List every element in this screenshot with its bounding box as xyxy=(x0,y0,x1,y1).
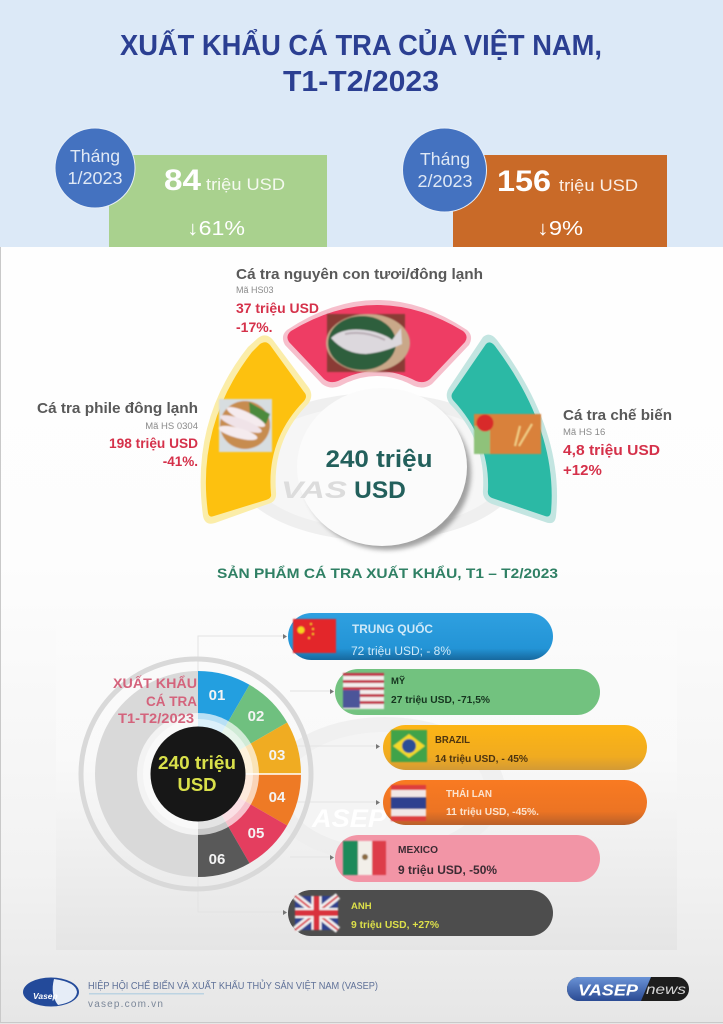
footer: VASEP news badge xyxy=(567,977,689,1001)
title xyxy=(120,28,602,98)
center total: 240 triệu USD xyxy=(281,388,471,550)
donut chart: USD xyxy=(177,774,217,795)
icon: processed food photo xyxy=(474,414,541,454)
segment: whole fish, red xyxy=(283,300,471,388)
pill: China: TRUNG QUỐC xyxy=(352,622,433,636)
label: processed: +12% xyxy=(563,462,602,479)
pill: UK: 9 triệu USD, +27% xyxy=(351,919,440,931)
header band xyxy=(0,0,723,247)
pill: Brazil xyxy=(376,725,647,770)
donut chart: 01 xyxy=(209,687,225,704)
segment: processed, teal xyxy=(447,335,557,523)
pill: Mexico xyxy=(330,835,600,882)
center total: 240 triệu USD: 240 triệu xyxy=(326,446,432,473)
label: processed: Cá tra chế biến xyxy=(563,407,672,424)
icon: flag USA xyxy=(343,673,384,709)
pill: China: 72 triệu USD; - 8% xyxy=(351,646,451,658)
pill: Brazil: 14 triệu USD, - 45% xyxy=(435,753,529,765)
pill: Mexico: MEXICO xyxy=(398,844,438,856)
segment 01 xyxy=(198,671,250,774)
donut chart xyxy=(81,659,311,889)
card: January 2023: ↓61% xyxy=(187,218,245,240)
footer: organisation text xyxy=(88,979,378,1010)
center total: 240 triệu USD: USD xyxy=(354,477,406,504)
pill: USA: 27 triệu USD, -71,5% xyxy=(391,694,491,706)
card: January 2023: 84 xyxy=(164,164,201,197)
icon: fillet photo xyxy=(217,399,272,452)
label: whole fish: -17%. xyxy=(236,319,273,335)
donut chart: 04 xyxy=(269,789,286,806)
watermark: VASEP upper: VAS xyxy=(281,477,347,504)
card: January 2023: Tháng xyxy=(70,146,120,166)
card: January 2023: triệu USD xyxy=(206,175,285,194)
pill: Mexico: 9 triệu USD, -50% xyxy=(398,863,497,877)
pill: UK xyxy=(283,890,553,936)
card: January 2023 xyxy=(55,128,327,247)
segment 02 xyxy=(198,685,287,774)
label: fillet: Mã HS 0304 xyxy=(145,421,198,432)
card: February 2023: triệu USD xyxy=(559,176,638,195)
donut chart: 06 xyxy=(209,851,225,868)
inner pale ring xyxy=(137,713,259,835)
label: whole fish xyxy=(236,266,483,335)
donut chart: 05 xyxy=(248,825,264,842)
donut chart: 240 triệu xyxy=(158,752,236,773)
label: whole fish: 37 triệu USD xyxy=(236,300,319,316)
pill: Thailand: THÁI LAN xyxy=(446,787,492,800)
pill: Brazil: BRAZIL xyxy=(435,735,470,746)
donut label: CÁ TRA xyxy=(146,694,197,709)
label: processed xyxy=(563,407,672,479)
segment: fillet, yellow xyxy=(201,335,311,524)
label: fillet: -41%. xyxy=(163,454,198,469)
label: whole fish: Mã HS03 xyxy=(236,285,274,295)
donut chart: 03 xyxy=(269,747,285,764)
watermark: VASEP lower: ASEP xyxy=(311,805,386,833)
lower chart panel xyxy=(56,600,677,950)
label: fillet: Cá tra phile đông lạnh xyxy=(37,400,198,417)
icon: flag UK xyxy=(295,896,338,930)
pill: UK: ANH xyxy=(351,901,372,912)
outer ring xyxy=(81,659,311,889)
icon: flag Brazil xyxy=(391,730,427,762)
donut label: T1-T2/2023 xyxy=(118,711,195,726)
pill: USA xyxy=(330,669,600,715)
label: whole fish: Cá tra nguyên con tươi/đông lạnh xyxy=(236,266,483,283)
donut chart: 02 xyxy=(248,708,264,725)
pill: USA: MỸ xyxy=(391,676,406,687)
pill: Thailand xyxy=(376,780,647,825)
card: February 2023: 156 xyxy=(497,165,551,198)
pill: China xyxy=(283,613,553,660)
segment 03 xyxy=(198,722,301,774)
icon: flag Mexico xyxy=(343,841,386,875)
card: February 2023: 2/2023 xyxy=(418,171,472,191)
donut label xyxy=(113,676,197,726)
label: processed: Mã HS 16 xyxy=(563,427,605,438)
page frame xyxy=(0,247,723,1022)
icon: fish photo xyxy=(326,314,410,372)
card: February 2023: ↓9% xyxy=(537,218,583,240)
watermark: VASEP lower xyxy=(265,717,505,863)
left gray half xyxy=(95,671,198,877)
label: processed: 4,8 triệu USD xyxy=(563,442,660,459)
icon: flag China xyxy=(293,619,336,653)
segment 04 xyxy=(198,774,301,826)
connector lines xyxy=(198,636,378,912)
card: February 2023 xyxy=(402,128,667,247)
segment 05 xyxy=(198,774,287,863)
center disc xyxy=(150,726,246,822)
donut label: XUẤT KHẨU xyxy=(113,676,197,691)
pill: Thailand: 11 triệu USD, -45%. xyxy=(446,806,539,818)
footer: VASEP logo xyxy=(23,978,79,1006)
section heading: SẢN PHẨM CÁ TRA XUẤT KHẨU, T1 – T2/2023 xyxy=(217,564,558,581)
label: fillet: 198 triệu USD xyxy=(109,436,198,451)
watermark: globe upper xyxy=(233,393,523,541)
card: January 2023: 1/2023 xyxy=(68,168,122,188)
footer: VASEP logo: Vasep xyxy=(33,991,58,1001)
segment 06 xyxy=(198,774,250,877)
footer: VASEP news badge: VASEP xyxy=(578,982,638,1000)
footer: VASEP news badge: news xyxy=(646,981,686,997)
footer: organisation text: vasep.com.vn xyxy=(88,999,164,1010)
icon: flag Thailand xyxy=(391,785,426,821)
title: T1-T2/2023 xyxy=(283,66,439,98)
label: fillet xyxy=(37,400,198,469)
card: February 2023: Tháng xyxy=(420,149,470,169)
title: XUẤT KHẨU CÁ TRA CỦA VIỆT NAM, xyxy=(120,28,602,62)
footer: organisation text: HIỆP HỘI CHẾ BIẾN VÀ XUẤT KHẨU THỦY SẢN VIỆT NAM (VASEP) xyxy=(88,979,378,992)
